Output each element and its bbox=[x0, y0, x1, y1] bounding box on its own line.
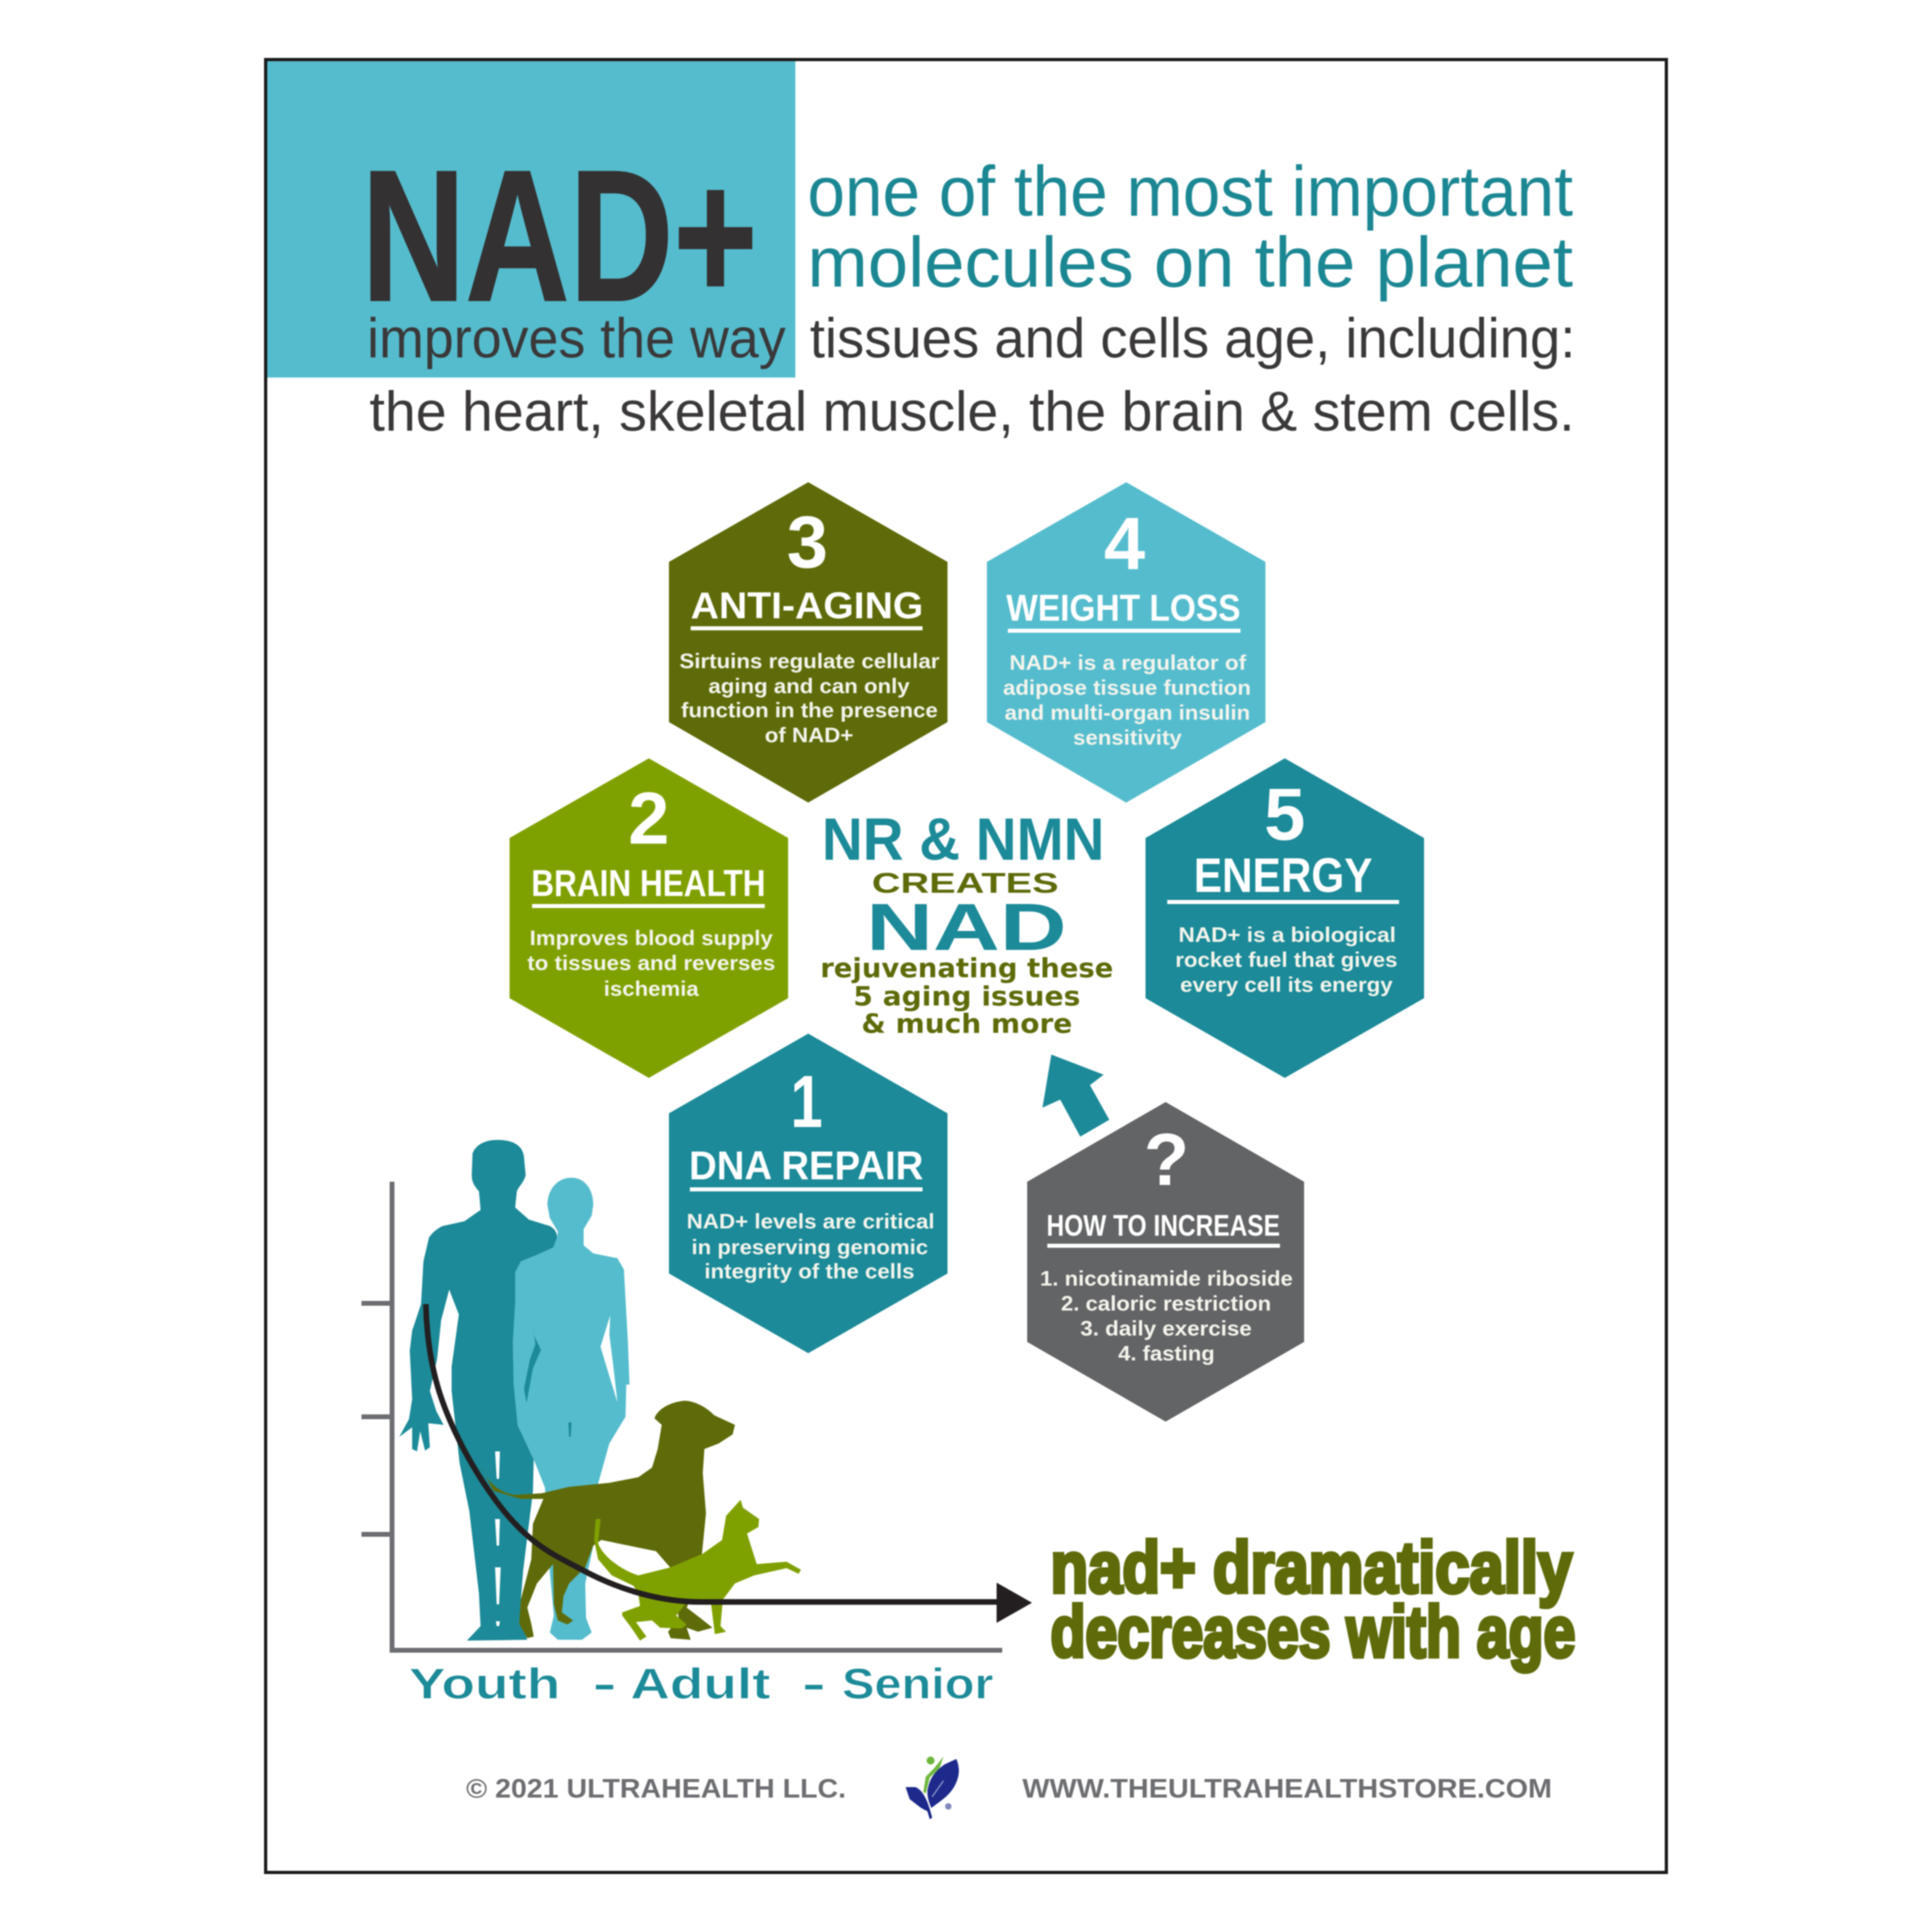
callout: nad+ dramatically decreases with age: decreases with age bbox=[1051, 1592, 1575, 1673]
center text: NR & NMN creates NAD bbox=[820, 806, 1113, 1039]
hexagon: how to increase: 1. nicotinamide riboside bbox=[1040, 1266, 1293, 1290]
hexagon: how to increase: HOW TO INCREASE bbox=[1046, 1209, 1280, 1242]
hexagon 1: DNA repair: 1 bbox=[791, 1061, 823, 1143]
hexagon 3: anti-aging: of NAD+ bbox=[765, 723, 853, 747]
hexagon 3: anti-aging: function in the presence bbox=[681, 698, 938, 722]
hexagon 2: brain health: to tissues and reverses bbox=[527, 951, 775, 975]
silhouettes of man, woman, dog and cat bbox=[399, 1140, 801, 1641]
hexagon 2: brain health: BRAIN HEALTH bbox=[531, 862, 766, 904]
footer website: WWW.THEULTRAHEALTHSTORE.COM bbox=[1022, 1773, 1552, 1803]
man silhouette bbox=[399, 1140, 557, 1641]
hexagon 3: anti-aging bbox=[669, 482, 947, 803]
intro text: the heart, skeletal muscle, the brain & stem cells. bbox=[369, 380, 1575, 443]
hexagon 3: anti-aging: ANTI-AGING bbox=[691, 584, 923, 626]
hexagon: how to increase: 2. caloric restriction bbox=[1061, 1291, 1271, 1315]
x-axis labels: - bbox=[592, 1660, 617, 1708]
hexagon 5: energy: rocket fuel that gives bbox=[1175, 947, 1397, 972]
center text: NR & NMN creates NAD: & much more bbox=[861, 1008, 1072, 1039]
teal header block bbox=[266, 60, 795, 378]
hexagon 4: weight loss: 4 bbox=[1104, 503, 1146, 585]
hexagon 5: energy bbox=[1146, 758, 1424, 1078]
center text: NR & NMN creates NAD: NAD bbox=[866, 890, 1067, 964]
hexagon 4: weight loss: adipose tissue function bbox=[1003, 675, 1251, 700]
x-axis labels: Youth bbox=[409, 1660, 560, 1708]
hexagon 4: weight loss: sensitivity bbox=[1073, 725, 1183, 749]
callout: nad+ dramatically decreases with age bbox=[1051, 1528, 1575, 1673]
icon: leaf logo bbox=[906, 1757, 959, 1819]
hexagon 2: brain health: ischemia bbox=[604, 976, 700, 1001]
hexagon 4: weight loss bbox=[987, 482, 1265, 803]
x-axis labels bbox=[409, 1660, 993, 1708]
hexagon 1: DNA repair: in preserving genomic bbox=[691, 1235, 928, 1259]
page frame bbox=[266, 60, 1666, 1872]
woman silhouette bbox=[513, 1178, 630, 1640]
arrow: up to center bbox=[1042, 1055, 1109, 1137]
x-axis labels: Senior bbox=[842, 1660, 993, 1708]
hexagon: how to increase: ? bbox=[1144, 1119, 1189, 1201]
hexagon 1: DNA repair bbox=[669, 1034, 947, 1353]
x-axis labels: - bbox=[802, 1660, 826, 1708]
hexagon 3: anti-aging: aging and can only bbox=[708, 674, 910, 698]
subtitle: one of the most important molecules on the planet: molecules on the planet bbox=[807, 222, 1573, 302]
center text: NR & NMN creates NAD: rejuvenating these bbox=[820, 952, 1113, 984]
dog silhouette bbox=[481, 1401, 735, 1640]
hexagon 4: weight loss: and multi-organ insulin bbox=[1005, 700, 1250, 724]
hexagon 2: brain health: 2 bbox=[628, 778, 670, 860]
hexagon 1: DNA repair: DNA REPAIR bbox=[689, 1143, 923, 1188]
hexagon 1: DNA repair: NAD+ levels are critical bbox=[687, 1209, 935, 1233]
chart axes bbox=[361, 1182, 1002, 1650]
intro text: improves the way bbox=[367, 307, 786, 369]
hexagon: how to increase bbox=[1027, 1102, 1304, 1422]
center text: NR & NMN creates NAD: CREATES bbox=[872, 868, 1059, 899]
hexagon 5: energy: NAD+ is a biological bbox=[1179, 923, 1396, 947]
hexagon: how to increase: 3. daily exercise bbox=[1080, 1316, 1252, 1340]
subtitle: one of the most important molecules on the planet bbox=[807, 151, 1573, 302]
footer copyright: © 2021 ULTRAHEALTH LLC. bbox=[466, 1773, 846, 1803]
cat silhouette bbox=[594, 1500, 801, 1641]
x-axis labels: Adult bbox=[630, 1660, 770, 1708]
hexagon 3: anti-aging: Sirtuins regulate cellular bbox=[679, 649, 939, 673]
intro text: tissues and cells age, including: bbox=[810, 307, 1575, 369]
callout: nad+ dramatically decreases with age: nad+ dramatically bbox=[1051, 1528, 1572, 1608]
hexagon 4: weight loss: NAD+ is a regulator of bbox=[1009, 650, 1246, 675]
subtitle: one of the most important molecules on the planet: one of the most important bbox=[807, 151, 1573, 231]
title: NAD+: NAD+ bbox=[361, 132, 758, 341]
chart: NAD+ decline with age bbox=[361, 1140, 1032, 1708]
hexagon 2: brain health bbox=[510, 758, 788, 1078]
center text: NR & NMN creates NAD: NR & NMN bbox=[822, 806, 1104, 873]
hexagon 4: weight loss: WEIGHT LOSS bbox=[1006, 587, 1241, 629]
hexagon 3: anti-aging: 3 bbox=[786, 502, 828, 584]
hexagon 5: energy: every cell its energy bbox=[1180, 972, 1393, 997]
hexagon 2: brain health: Improves blood supply bbox=[530, 926, 774, 950]
intro text bbox=[367, 307, 1575, 443]
decline curve with arrow bbox=[426, 1304, 1032, 1623]
hexagon: how to increase: 4. fasting bbox=[1118, 1341, 1215, 1365]
hexagon 5: energy: 5 bbox=[1264, 774, 1306, 856]
center text: NR & NMN creates NAD: 5 aging issues bbox=[853, 980, 1080, 1012]
leg gaps bbox=[495, 1451, 501, 1626]
hexagon 1: DNA repair: integrity of the cells bbox=[704, 1259, 914, 1283]
hexagon 5: energy: ENERGY bbox=[1194, 848, 1373, 902]
